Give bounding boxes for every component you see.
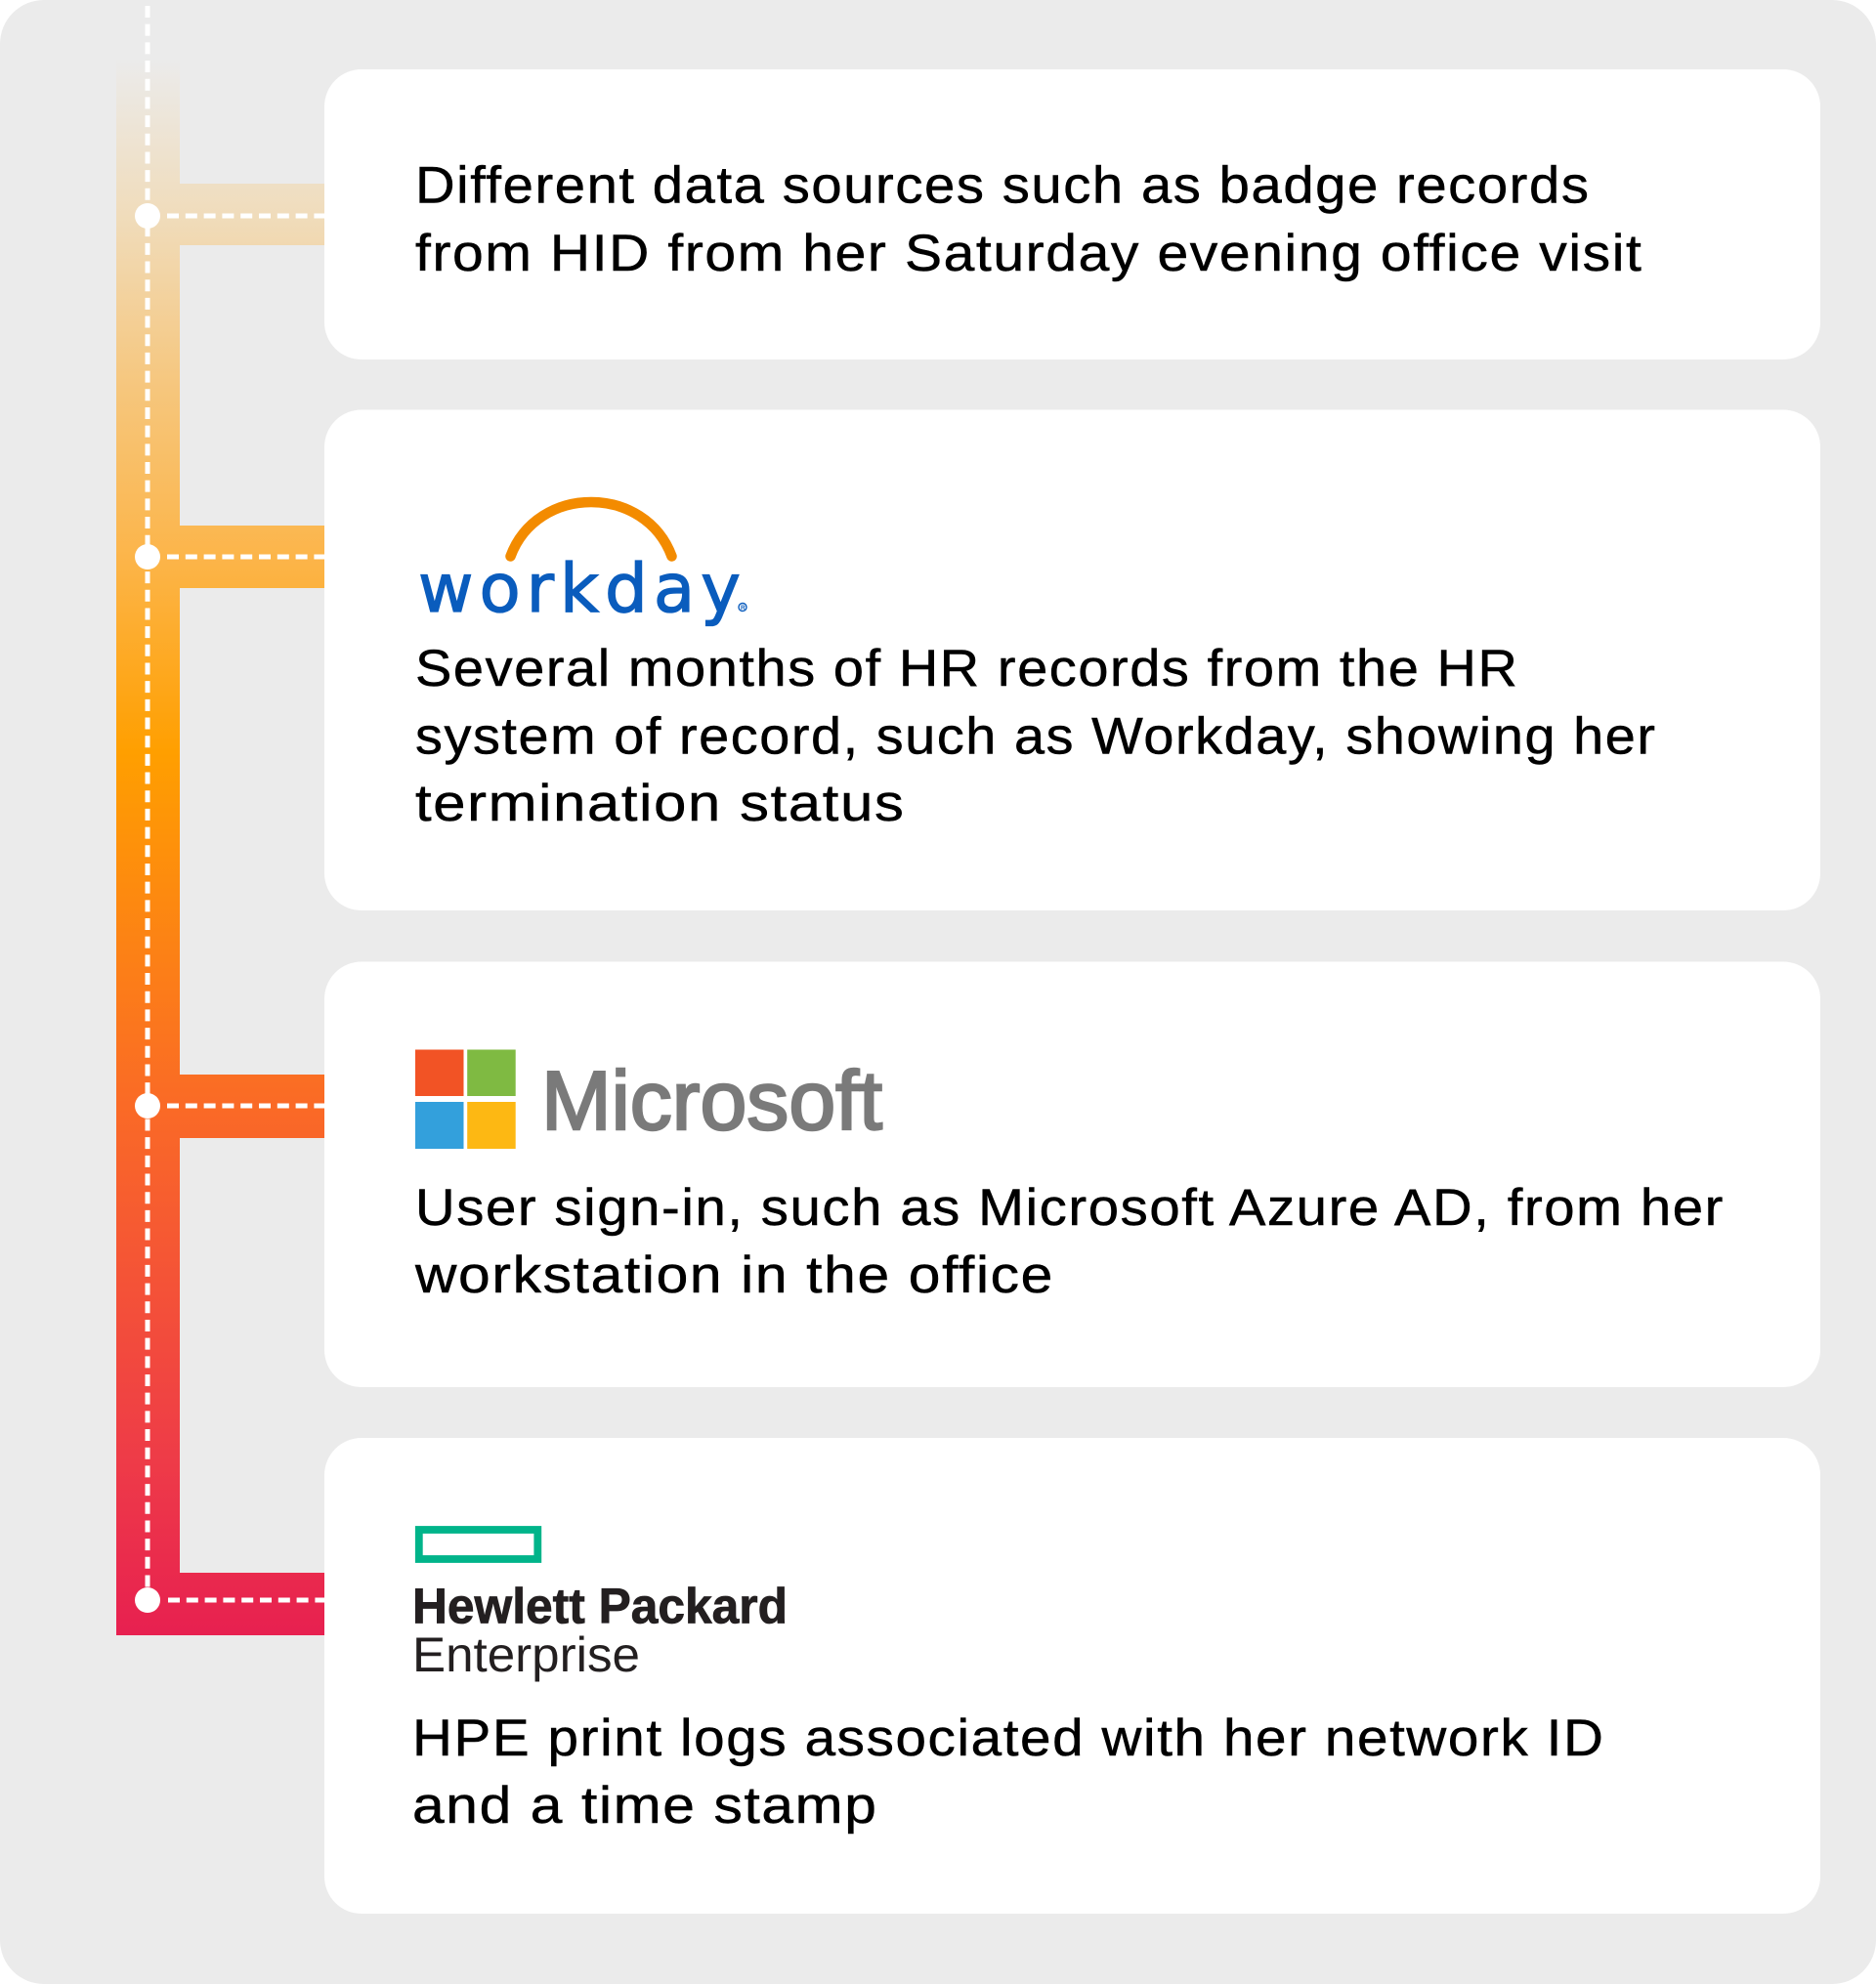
timeline dots bbox=[135, 203, 160, 1613]
logo wordmark: workday bbox=[418, 550, 741, 628]
logo arc bbox=[510, 502, 672, 557]
vertical dashed line bbox=[145, 6, 150, 1587]
card text: Different data sources such as badge records bbox=[415, 156, 1591, 215]
card text bbox=[414, 1179, 1725, 1304]
logo: Workday bbox=[418, 502, 746, 628]
card background bbox=[324, 410, 1820, 910]
registered mark: R bbox=[741, 605, 746, 612]
card background bbox=[324, 961, 1820, 1387]
card text bbox=[412, 1710, 1605, 1835]
registered mark bbox=[739, 604, 746, 612]
card text: system of record, such as Workday, showing her bbox=[415, 707, 1657, 766]
logo squares bbox=[415, 1049, 516, 1149]
logo wordmark: Hewlett Packard bbox=[412, 1579, 788, 1633]
card text: HPE print logs associated with her network ID bbox=[412, 1710, 1605, 1767]
branch dashed lines bbox=[167, 216, 324, 1600]
card background bbox=[324, 69, 1820, 359]
panel: Microsoft card bbox=[324, 961, 1820, 1387]
card text: termination status bbox=[415, 775, 905, 832]
logo subtitle: Enterprise bbox=[412, 1627, 640, 1682]
gradient band with branches bbox=[116, 59, 324, 1635]
card text bbox=[415, 640, 1657, 832]
card text: and a time stamp bbox=[412, 1777, 877, 1835]
logo: Hewlett Packard Enterprise bbox=[412, 1530, 788, 1682]
card text bbox=[415, 156, 1643, 282]
logo: Microsoft bbox=[415, 1049, 882, 1149]
panel: badge records card bbox=[324, 69, 1820, 359]
card text: from HID from her Saturday evening office visit bbox=[415, 225, 1643, 282]
card text: Several months of HR records from the HR bbox=[415, 640, 1518, 697]
card background bbox=[324, 1438, 1820, 1914]
panel: HPE card bbox=[324, 1438, 1820, 1914]
logo wordmark: Microsoft bbox=[541, 1055, 882, 1148]
panel: Workday card bbox=[324, 410, 1820, 910]
timeline connector bbox=[116, 6, 324, 1635]
card text: workstation in the office bbox=[414, 1246, 1054, 1304]
logo rectangle bbox=[419, 1530, 537, 1559]
card text: User sign-in, such as Microsoft Azure AD, from her bbox=[415, 1179, 1725, 1237]
